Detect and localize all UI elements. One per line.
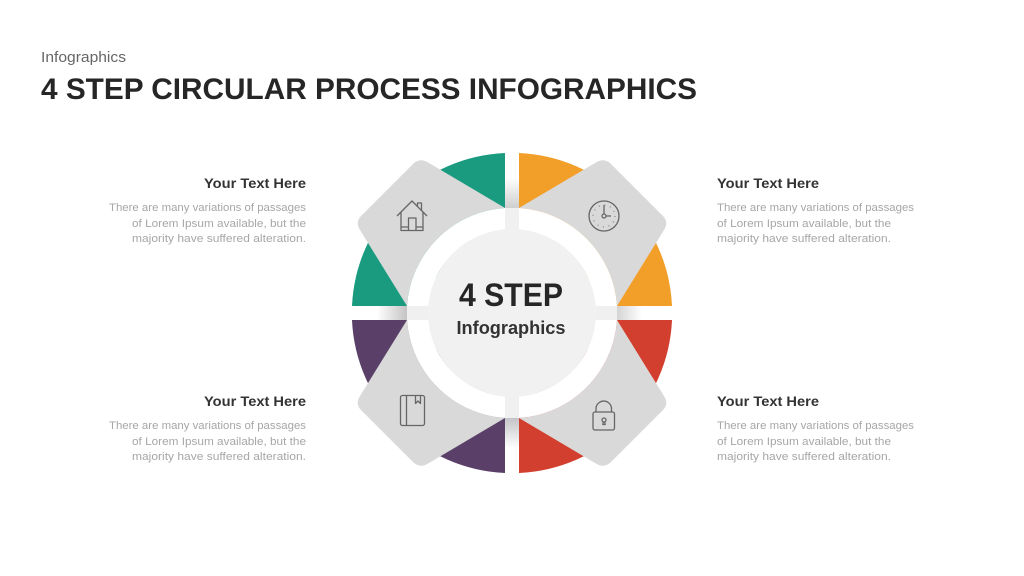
text block: bottom-right: of Lorem Ipsum available, but the <box>717 436 891 448</box>
text block: top-right <box>717 175 915 245</box>
text block: bottom-left: Your Text Here <box>204 393 306 409</box>
gap shading: vertical bottom <box>505 418 519 473</box>
text block: top-left: Your Text Here <box>204 175 306 191</box>
white ring: bottom-left <box>407 320 505 418</box>
white ring: top-left <box>407 208 505 306</box>
text block: bottom-right: There are many variations of passages <box>717 420 915 432</box>
icon: house <box>397 201 427 230</box>
text block: top-right: There are many variations of passages <box>717 202 915 214</box>
text block: top-right: of Lorem Ipsum available, but the <box>717 218 891 230</box>
segment: purple <box>352 320 505 473</box>
center heading: 4 STEP <box>459 277 563 313</box>
connector tab: bottom <box>505 392 519 418</box>
gap shading: horizontal right <box>617 306 672 320</box>
center subheading: Infographics <box>456 318 566 338</box>
text block: bottom-left <box>109 393 307 463</box>
text block: bottom-left: There are many variations of passages <box>109 420 307 432</box>
connector tab: left <box>407 306 433 320</box>
text block: bottom-left: majority have suffered alteration. <box>132 451 306 463</box>
panel: bottom-left card <box>358 320 505 466</box>
text block: bottom-right: majority have suffered alteration. <box>717 451 891 463</box>
panel: top-left card <box>358 160 505 306</box>
icon: book <box>400 396 424 426</box>
gap shading: horizontal left <box>352 306 407 320</box>
white ring: top-right <box>519 208 617 306</box>
text block: top-left: of Lorem Ipsum available, but the <box>132 218 306 230</box>
text block: top-left: There are many variations of passages <box>109 202 307 214</box>
panel: bottom-right card <box>519 320 666 466</box>
segment: red <box>519 320 672 473</box>
panel: top-right card <box>519 160 666 306</box>
title: 4 STEP CIRCULAR PROCESS INFOGRAPHICS <box>41 73 697 106</box>
text block: top-right: Your Text Here <box>717 175 819 191</box>
text block: top-right: majority have suffered alteration. <box>717 233 891 245</box>
icon: clock <box>589 201 619 231</box>
text block: top-left <box>109 175 307 245</box>
gap shading: vertical top <box>505 153 519 208</box>
connector tab: right <box>591 306 617 320</box>
center circle <box>428 229 596 397</box>
subtitle: Infographics <box>41 49 126 66</box>
circular diagram <box>352 153 672 473</box>
segment: orange <box>519 153 672 306</box>
text block: top-left: majority have suffered alteration. <box>132 233 306 245</box>
white ring: bottom-right <box>519 320 617 418</box>
text block: bottom-right: Your Text Here <box>717 393 819 409</box>
text block: bottom-left: of Lorem Ipsum available, but the <box>132 436 306 448</box>
icon: padlock <box>593 401 614 430</box>
segment: green <box>352 153 505 306</box>
connector tab: top <box>505 208 519 234</box>
text block: bottom-right <box>717 393 915 463</box>
